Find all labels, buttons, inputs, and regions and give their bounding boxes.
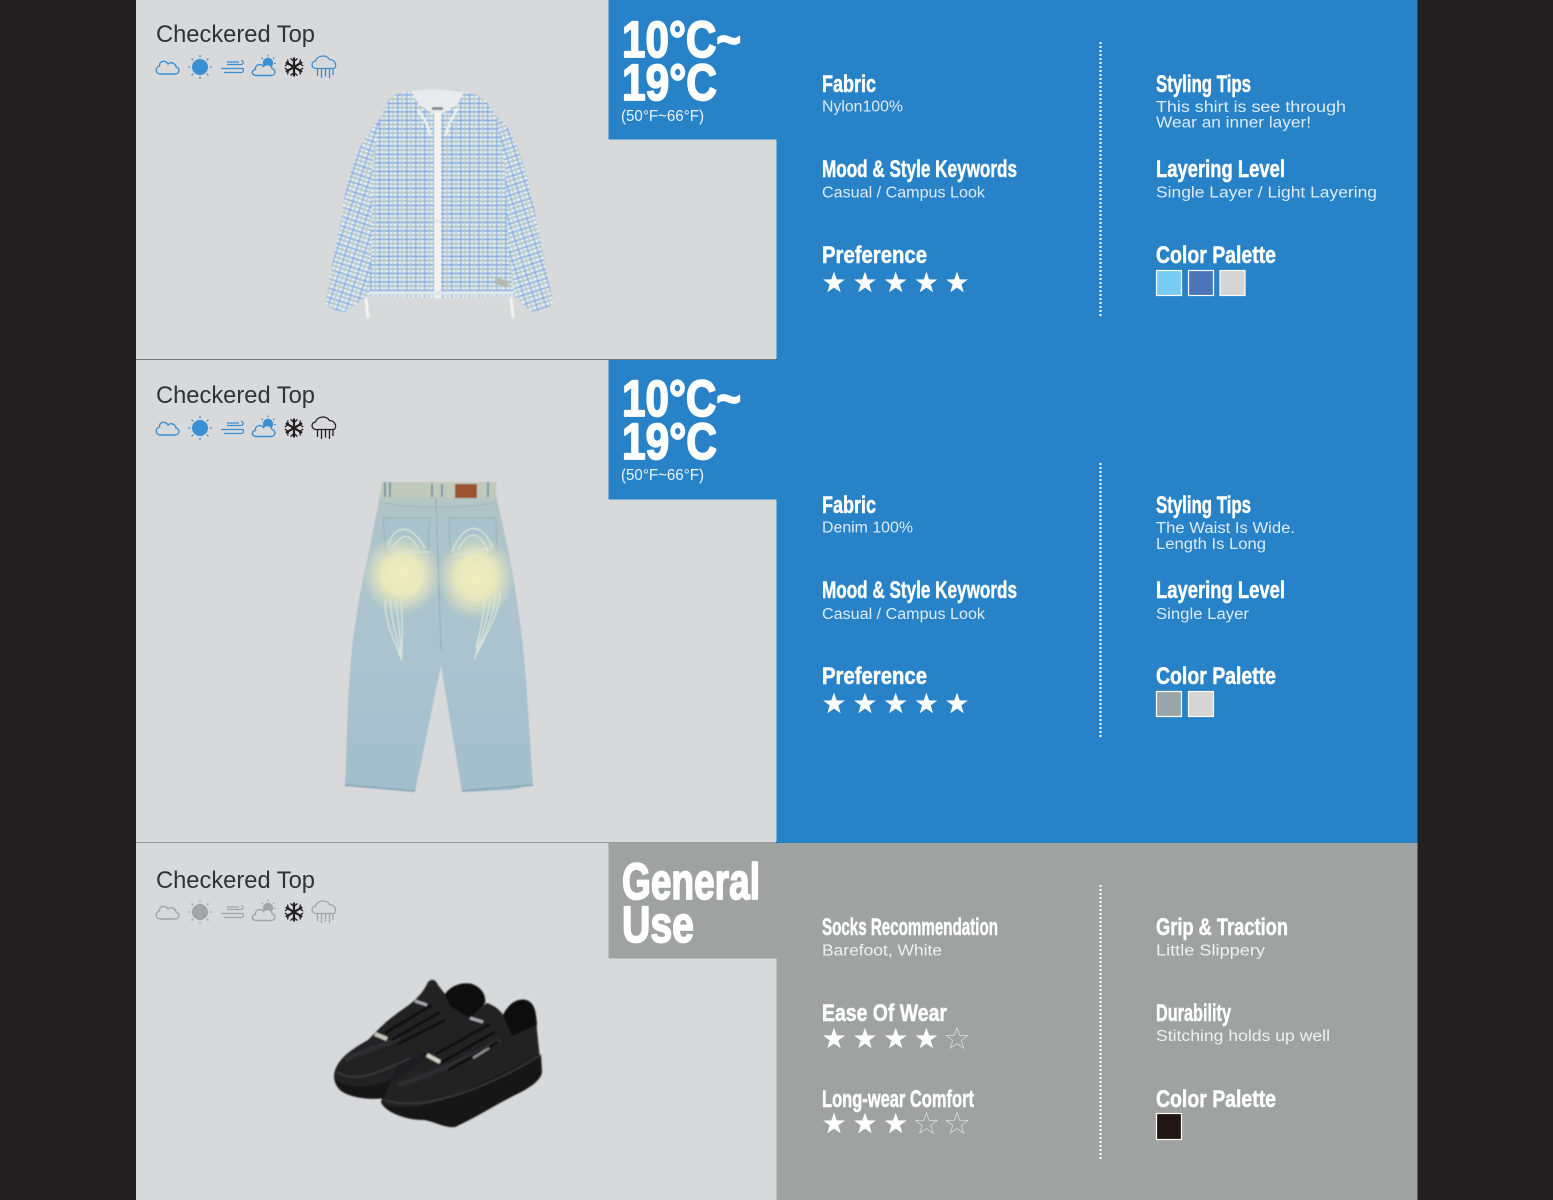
mood and style keywords: Casual / Campus Look [822, 606, 985, 623]
panel: row 3 general use tag [608, 843, 776, 958]
general use heading second line: Use [622, 896, 694, 953]
color palette [1156, 663, 1276, 716]
icon: rain [312, 56, 336, 78]
general use heading: General [622, 853, 760, 910]
preference rating [822, 242, 968, 292]
fabric [822, 71, 903, 116]
icon: wind [221, 906, 243, 918]
icon: snow [285, 418, 303, 438]
product image: black chunky sneakers [334, 980, 542, 1127]
icon: sun [188, 416, 212, 440]
row 1 product title: Checkered Top [156, 21, 315, 48]
panel: row 1 product area [136, 0, 776, 359]
fabric: Fabric [822, 71, 876, 98]
layering level: Single Layer [1156, 606, 1249, 623]
row 3 weather icons [156, 900, 336, 924]
mood and style keywords [822, 156, 1017, 202]
divider: row 3 [1100, 885, 1102, 1160]
fabric: Nylon100% [822, 98, 903, 116]
panel: row 2 product area [136, 360, 776, 842]
durability: Durability [1156, 1000, 1231, 1027]
row 2 weather icons [156, 416, 336, 440]
temperature range second line: 19°C [622, 54, 717, 111]
mood and style keywords: Casual / Campus Look [822, 184, 985, 202]
styling tips [1156, 492, 1295, 553]
ease of wear rating: Ease Of Wear [822, 1000, 947, 1027]
icon: partly cloudy [252, 900, 276, 920]
grip and traction: Grip & Traction [1156, 914, 1288, 941]
durability [1156, 1000, 1330, 1045]
panel: row 3 details [822, 914, 1330, 1140]
color palette [1156, 242, 1276, 296]
socks recommendation: Barefoot, White [822, 942, 942, 960]
panel: row 1 temperature tag [608, 0, 776, 140]
layering level [1156, 577, 1285, 623]
panel: row 1 details [822, 71, 1377, 296]
icon: rain [312, 901, 336, 923]
styling tips [1156, 71, 1346, 132]
panel: gray details background [776, 843, 1418, 1200]
panel: row 2 temperature tag [608, 360, 776, 500]
preference rating [822, 663, 968, 713]
icon: partly cloudy [252, 54, 276, 76]
color palette: Color Palette [1156, 1086, 1276, 1113]
row 1 weather icons [156, 54, 336, 79]
product image: washed wide denim jeans [345, 482, 533, 792]
fabric [822, 492, 913, 536]
icon: sun [188, 900, 212, 924]
layering level: Layering Level [1156, 577, 1285, 604]
fahrenheit range: (50°F~66°F) [621, 108, 704, 125]
temperature range second line: 19°C [622, 413, 717, 470]
grip and traction: Little Slippery [1156, 942, 1265, 960]
layering level: Single Layer / Light Layering [1156, 184, 1377, 202]
panel: row 3 product area [136, 843, 776, 1200]
divider: row 2 [1100, 463, 1102, 738]
temperature range: 10°C~ [622, 370, 741, 427]
styling tips: Wear an inner layer! [1156, 114, 1311, 132]
divider: row 1 [1100, 42, 1102, 317]
icon: wind [221, 60, 243, 72]
row 3 product title: Checkered Top [156, 867, 315, 894]
preference rating: Preference [822, 663, 927, 690]
panel: blue details background [776, 0, 1418, 843]
icon: cloud [156, 422, 179, 435]
icon: cloud [156, 906, 179, 919]
grip and traction [1156, 914, 1288, 960]
icon: cloud [156, 61, 179, 74]
icon: snow [285, 58, 303, 76]
ease of wear rating [822, 1000, 968, 1048]
socks recommendation [822, 914, 998, 960]
mood and style keywords [822, 577, 1017, 623]
row 2 product title: Checkered Top [156, 382, 315, 409]
socks recommendation: Socks Recommendation [822, 914, 998, 941]
panel: row 2 details [822, 492, 1295, 716]
styling tips: This shirt is see through [1156, 99, 1346, 116]
color palette [1156, 1086, 1276, 1140]
mood and style keywords: Mood & Style Keywords [822, 577, 1017, 604]
icon: snow [285, 902, 303, 922]
long-wear comfort rating [822, 1086, 974, 1133]
styling tips: Length Is Long [1156, 536, 1266, 553]
styling tips: Styling Tips [1156, 492, 1251, 519]
layering level [1156, 156, 1377, 202]
styling tips: Styling Tips [1156, 71, 1251, 98]
layering level: Layering Level [1156, 156, 1285, 183]
icon: rain [312, 417, 336, 439]
fahrenheit range: (50°F~66°F) [621, 467, 704, 484]
fabric: Denim 100% [822, 520, 913, 536]
mood and style keywords: Mood & Style Keywords [822, 156, 1017, 183]
icon: sun [188, 55, 212, 79]
styling tips: The Waist Is Wide. [1156, 520, 1295, 537]
temperature range: 10°C~ [622, 11, 741, 68]
color palette: Color Palette [1156, 242, 1276, 269]
preference rating: Preference [822, 242, 927, 269]
product image: checkered hooded jacket [325, 89, 553, 318]
icon: partly cloudy [252, 416, 276, 436]
fabric: Fabric [822, 492, 876, 519]
long-wear comfort rating: Long-wear Comfort [822, 1086, 974, 1113]
durability: Stitching holds up well [1156, 1028, 1330, 1045]
color palette: Color Palette [1156, 663, 1276, 690]
icon: wind [221, 422, 243, 434]
